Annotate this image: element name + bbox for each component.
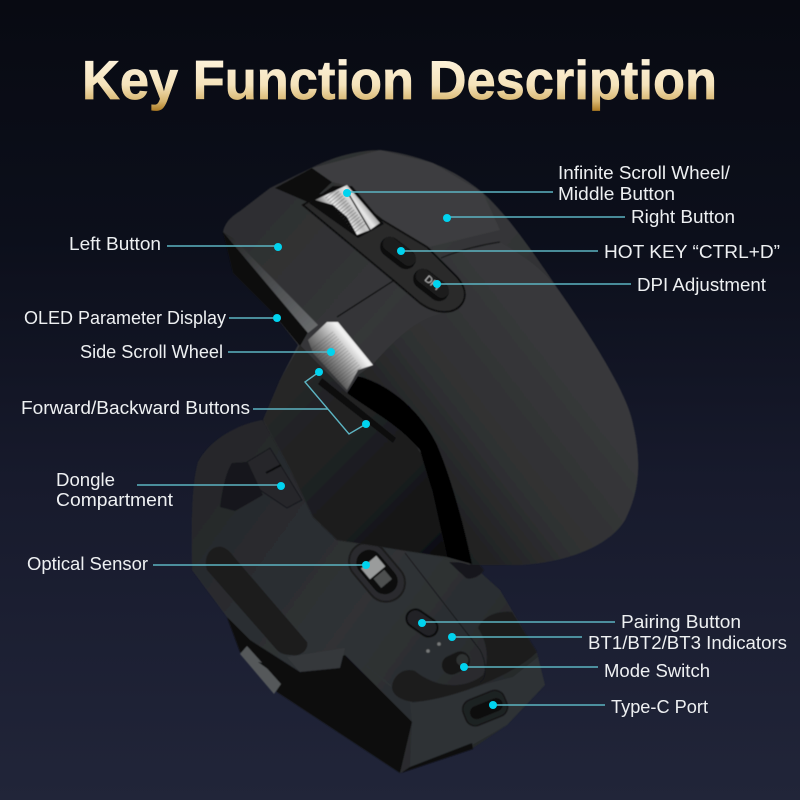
right palm shading: [358, 242, 638, 565]
callout labels: Dongle: [56, 470, 115, 490]
callout labels: Side Scroll Wheel: [80, 342, 223, 362]
optical sensor: [341, 535, 413, 609]
top black band: [275, 168, 332, 203]
callout labels: HOT KEY “CTRL+D”: [604, 242, 780, 262]
foot pad: upper left: [220, 462, 263, 511]
callout labels: Optical Sensor: [27, 554, 148, 574]
callout labels: Left Button: [69, 234, 161, 254]
pairing button: [403, 606, 441, 640]
callout labels: Right Button: [631, 207, 735, 227]
thumb panel: [263, 345, 447, 557]
main scroll wheel: [315, 185, 380, 235]
indicator lights: [426, 649, 430, 653]
callout labels: DPI Adjustment: [637, 275, 766, 295]
underside body: [192, 420, 545, 773]
side scroll wheel: [308, 322, 373, 390]
callout labels: BT1/BT2/BT3 Indicators: [588, 633, 787, 653]
underside scroll wheel: [240, 646, 281, 694]
illustration: mouse top: [223, 150, 638, 565]
callout labels: Mode Switch: [604, 661, 710, 681]
illustration: mouse underside: [192, 420, 545, 773]
DPI button: [409, 265, 453, 305]
wheel well: [309, 186, 384, 238]
thumb groove: [347, 376, 472, 564]
foot pad: right and bottom crescent: [392, 612, 537, 702]
callout labels: Forward/Backward Buttons: [21, 398, 250, 418]
callout labels: Pairing Button: [621, 612, 741, 632]
left black flank: [223, 232, 308, 346]
foot pad: large left: [206, 547, 307, 655]
callout labels: Middle Button: [558, 184, 675, 204]
dongle compartment: [247, 448, 302, 508]
shiny edge strip: [223, 232, 318, 333]
callouts: marker dots: [273, 189, 497, 709]
callout labels: Compartment: [56, 490, 173, 510]
type-c port: [460, 687, 511, 729]
centre channel: [303, 195, 465, 312]
lip: [287, 648, 345, 672]
seam: [405, 553, 485, 682]
seams: [337, 281, 393, 317]
callout labels: Infinite Scroll Wheel/: [558, 163, 730, 183]
side buttons: [318, 378, 396, 443]
mode switch: [438, 648, 474, 678]
top shell outline: [223, 150, 638, 565]
foot pad: right upper: [449, 562, 484, 579]
callouts: leader lines: [137, 192, 631, 705]
title: Key Function Description: [82, 49, 717, 111]
callout labels: [21, 163, 787, 717]
callout labels: Type-C Port: [611, 697, 708, 717]
underside lower front wall: [346, 649, 545, 767]
underside black facet: [227, 617, 412, 773]
callout labels: OLED Parameter Display: [24, 308, 226, 328]
illustration: mouse top: DPI: [422, 274, 442, 293]
hot key button: [376, 233, 420, 273]
